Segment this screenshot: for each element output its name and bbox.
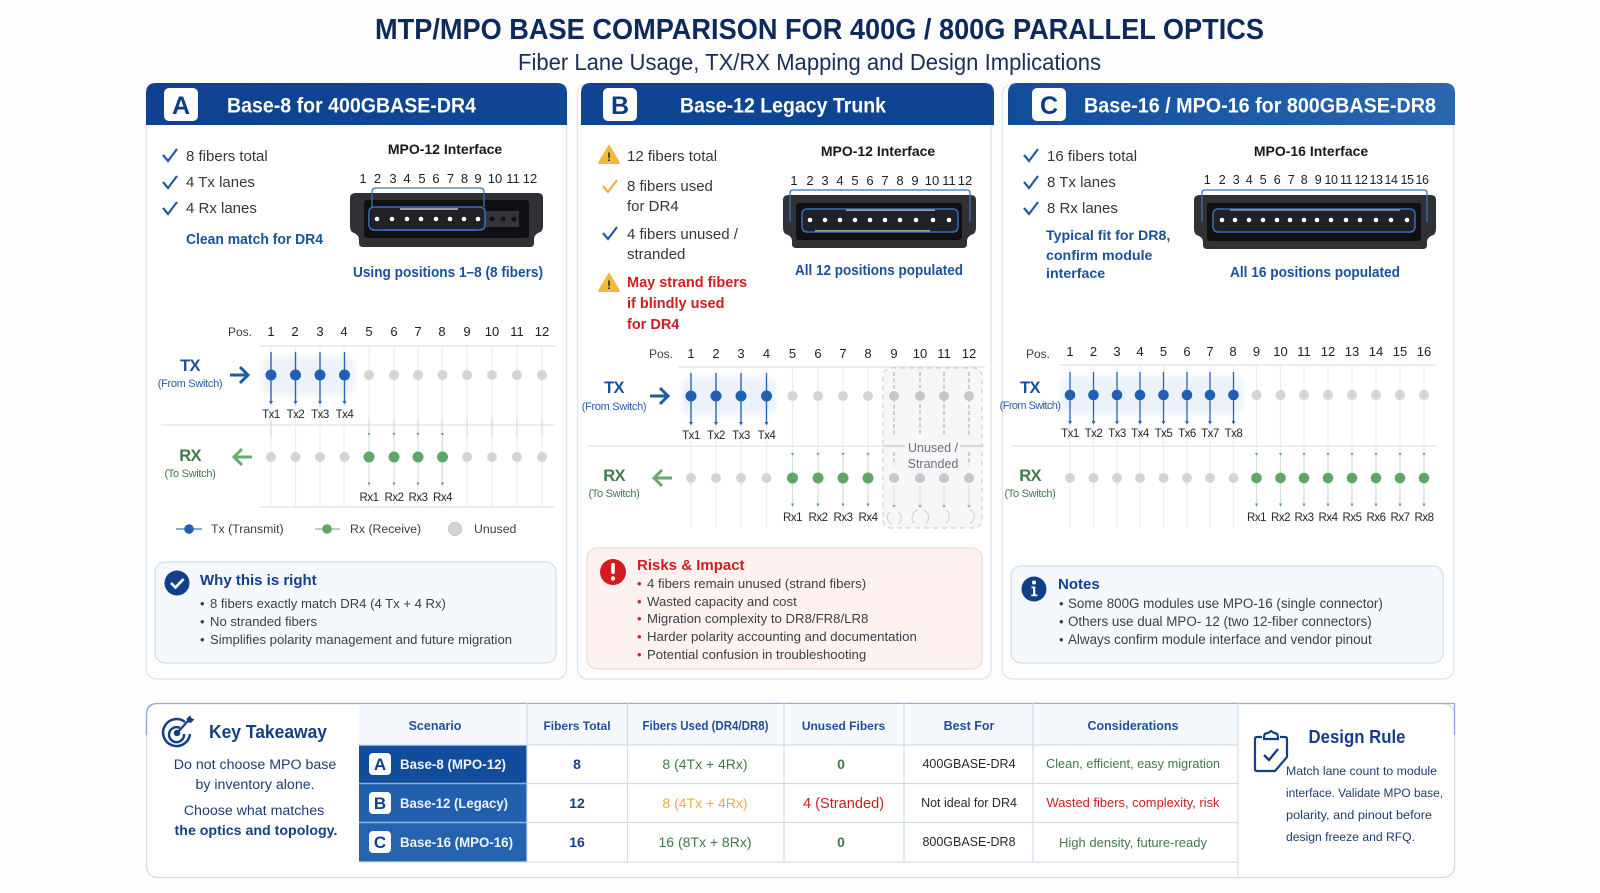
panel A lane map chart: 4 (340, 324, 348, 339)
RX dots: Rx4 (859, 512, 879, 524)
panel C checklist: 16 fibers total (1047, 148, 1137, 165)
callout: risks and impact: Migration complexity to DR8/FR8/LR8 (647, 611, 868, 626)
panel C connector diagram: 13 (1370, 173, 1383, 187)
RX dots: Rx1 (360, 492, 379, 504)
TX dots (1061, 372, 1429, 440)
panel A connector diagram: 12 (523, 171, 537, 186)
panel C connector diagram: 14 (1385, 173, 1398, 187)
table header: Considerations (1088, 719, 1179, 733)
panel A connector diagram (350, 141, 543, 281)
panel: bottom summary (146, 703, 1454, 878)
panel B header: B (611, 92, 629, 120)
panel B connector diagram: 5 (851, 173, 859, 188)
panel B connector diagram: 8 (896, 173, 904, 188)
panel B lane map chart: 5 (789, 346, 796, 361)
panel C lane map chart: 1 (1066, 344, 1074, 359)
panel C connector diagram: 7 (1288, 173, 1295, 187)
TX dots: Tx2 (707, 430, 725, 442)
panel A connector diagram: 4 (403, 171, 411, 186)
row: Base-12 (369, 792, 1220, 814)
RX row label (1004, 467, 1056, 500)
panel C lane map chart: 15 (1393, 344, 1407, 359)
panel B lane map chart: 7 (839, 346, 847, 361)
panel B checklist: May strand fibers (627, 275, 747, 291)
panel A lane map chart: 10 (485, 324, 499, 339)
row: Base-16: 0 (837, 834, 845, 850)
TX dots: Tx5 (1155, 428, 1172, 440)
panel C connector diagram: 3 (1233, 173, 1240, 187)
panel C header: Base-16 / MPO-16 for 800GBASE-DR8 (1084, 94, 1436, 118)
table header: Best For (944, 719, 994, 733)
TX dots: Tx1 (262, 409, 280, 421)
callout: notes: Some 800G modules use MPO-16 (single connector) (1068, 596, 1383, 611)
callout: risks and impact: Risks & Impact (637, 557, 745, 574)
row: Base-12: B (374, 794, 386, 813)
panel C lane map chart: 7 (1206, 344, 1214, 359)
panel A checklist: 8 fibers total (186, 148, 268, 165)
row: Base-12: 8 (4Tx + 4Rx) (662, 795, 748, 811)
RX dots: Rx7 (1391, 512, 1410, 524)
RX row label (164, 447, 252, 480)
panel B checklist (599, 146, 747, 333)
row: Base-8 (369, 753, 1220, 775)
panel C connector diagram: 12 (1355, 173, 1368, 187)
panel C lane map chart: 9 (1253, 344, 1260, 359)
callout: risks and impact: 4 fibers remain unused (strand fibers) (647, 576, 866, 591)
panel B lane map chart (582, 346, 985, 528)
panel B connector diagram: 11 (942, 173, 956, 188)
RX dots: Rx5 (1343, 512, 1362, 524)
panel B lane map chart: 3 (737, 346, 745, 361)
RX dots: Rx2 (1271, 512, 1290, 524)
callout: notes: Others use dual MPO- 12 (two 12-fiber connectors) (1068, 614, 1372, 629)
panel B connector diagram: 12 (958, 173, 972, 188)
panel B lane map chart: 1 (687, 346, 695, 361)
TX dots (682, 373, 873, 442)
panel A lane map chart: 9 (463, 324, 471, 339)
panel C checklist: 8 Rx lanes (1047, 200, 1118, 217)
TX row label (158, 357, 248, 390)
panel C lane map chart: 13 (1345, 344, 1359, 359)
RX dots: Rx3 (1295, 512, 1314, 524)
panel B checklist: ! (607, 152, 611, 164)
panel C lane map chart: 10 (1273, 344, 1288, 359)
panel C lane map chart: 3 (1113, 344, 1121, 359)
panel A checklist: 4 Rx lanes (186, 200, 257, 217)
panel B checklist: ! (607, 280, 611, 292)
stranded zone (883, 368, 982, 528)
TX row label: (From Switch) (158, 378, 222, 390)
panel C lane map chart (1000, 344, 1436, 528)
TX dots: Tx1 (1061, 428, 1079, 440)
panel B connector diagram: 6 (866, 173, 874, 188)
RX dots (1065, 453, 1434, 524)
RX dots (266, 433, 547, 504)
TX dots: Tx2 (1085, 428, 1102, 440)
panel A lane map chart: 11 (510, 324, 524, 339)
TX row label: TX (604, 379, 625, 397)
panel C connector diagram: MPO-16 Interface (1254, 143, 1368, 159)
design rule: polarity, and pinout before (1286, 808, 1432, 822)
callout: why this is right: • (200, 614, 205, 629)
panel A connector diagram: 2 (374, 171, 381, 186)
panel A lane map chart: Pos. (228, 325, 252, 339)
TX row label: TX (1020, 379, 1041, 397)
panel A connector diagram: 3 (389, 171, 397, 186)
design rule (1255, 727, 1443, 844)
panel: A Base-8 (146, 83, 567, 679)
panel C lane map chart: 14 (1369, 344, 1383, 359)
callout: why this is right: 8 fibers exactly match DR4 (4 Tx + 4 Rx) (210, 596, 446, 611)
key takeaway (163, 716, 337, 839)
table header: Fibers Used (DR4/DR8) (642, 719, 768, 733)
TX row label (1000, 379, 1060, 412)
key takeaway: Choose what matches (184, 803, 324, 819)
design rule: design freeze and RFQ. (1286, 830, 1415, 844)
panel A header (146, 83, 567, 125)
panel A connector diagram: 6 (432, 171, 440, 186)
callout: risks and impact: Harder polarity accounting and documentation (647, 629, 917, 644)
panel C lane map chart: 16 (1417, 344, 1431, 359)
callout: risks and impact (587, 548, 982, 669)
callout: notes (1011, 566, 1443, 663)
callout: risks and impact: • (637, 629, 642, 644)
panel C connector diagram: 4 (1246, 173, 1253, 187)
panel A lane map chart: 1 (267, 324, 275, 339)
row: Base-16: 16 (8Tx + 8Rx) (659, 834, 751, 850)
panel A lane map chart: 6 (390, 324, 398, 339)
RX dots: Rx6 (1367, 512, 1386, 524)
panel A header: A (172, 92, 190, 120)
panel A legend: Rx (Receive) (350, 522, 421, 536)
RX dots: Rx1 (1247, 512, 1266, 524)
panel A lane map chart: 7 (414, 324, 422, 339)
RX row label: (To Switch) (1004, 488, 1056, 500)
panel B lane map chart: 11 (937, 346, 951, 361)
panel C connector diagram: 10 (1325, 173, 1338, 187)
RX dots: Rx4 (1319, 512, 1339, 524)
TX dots: Tx3 (311, 409, 329, 421)
panel B checklist: for DR4 (627, 317, 679, 333)
panel C checklist: confirm module (1046, 248, 1153, 264)
panel C lane map chart: 2 (1090, 344, 1097, 359)
RX dots: Rx8 (1415, 512, 1434, 524)
panel A connector diagram: 5 (418, 171, 426, 186)
icon: clipboard check (1255, 731, 1287, 771)
panel C checklist (1024, 148, 1170, 282)
panel B checklist: 8 fibers used (627, 178, 713, 195)
panel B lane map chart: 8 (864, 346, 872, 361)
row: Base-16: Base-16 (MPO-16) (400, 835, 513, 850)
panel A checklist: Clean match for DR4 (186, 232, 323, 248)
RX row label: RX (1019, 467, 1041, 485)
RX row label: (To Switch) (588, 488, 640, 500)
TX dots: Tx3 (1108, 428, 1126, 440)
panel C checklist: Typical fit for DR8, (1046, 228, 1170, 244)
panel A lane map chart: 12 (535, 324, 549, 339)
panel A connector diagram: MPO-12 Interface (388, 141, 502, 157)
callout: notes: • (1059, 614, 1064, 629)
panel C header: C (1040, 92, 1058, 120)
row: Base-12: Base-12 (Legacy) (400, 796, 508, 811)
panel C lane map chart: 4 (1136, 344, 1144, 359)
TX dots: Tx3 (732, 430, 750, 442)
row: Base-16: High density, future-ready (1059, 836, 1208, 850)
panel B lane map chart: 10 (913, 346, 927, 361)
panel B header (581, 83, 994, 125)
panel C connector diagram: 11 (1340, 173, 1353, 187)
RX dots: Rx2 (385, 492, 404, 504)
stranded zone: Unused / (908, 441, 959, 455)
panel B header: Base-12 Legacy Trunk (680, 94, 886, 118)
panel C connector diagram: 9 (1315, 173, 1322, 187)
panel: B Base-12 (578, 83, 994, 679)
panel A header: Base-8 for 400GBASE-DR4 (227, 94, 476, 118)
key takeaway: by inventory alone. (195, 777, 315, 793)
panel B connector diagram: 4 (836, 173, 844, 188)
panel B lane map chart: 12 (962, 346, 976, 361)
panel A connector diagram: 9 (474, 171, 482, 186)
callout: why this is right: • (200, 596, 205, 611)
panel A lane map chart: 8 (438, 324, 446, 339)
TX row label: TX (180, 357, 201, 375)
TX dots: Tx8 (1225, 428, 1242, 440)
panel B lane map chart: Pos. (649, 347, 673, 361)
callout: notes: • (1059, 632, 1064, 647)
design rule: interface. Validate MPO base, (1286, 786, 1443, 800)
TX dots: Tx1 (682, 430, 700, 442)
panel B checklist: if blindly used (627, 296, 724, 312)
key takeaway: Key Takeaway (209, 722, 327, 742)
panel A connector diagram: 10 (488, 171, 502, 186)
callout: risks and impact: • (637, 594, 642, 609)
row: Base-12: Wasted fibers, complexity, risk (1046, 796, 1220, 810)
panel C lane map chart: Pos. (1026, 347, 1050, 361)
table header: Scenario (409, 719, 462, 733)
panel A connector diagram: 8 (461, 171, 468, 186)
panel C connector diagram: 2 (1219, 173, 1226, 187)
TX row label: (From Switch) (1000, 400, 1060, 412)
TX row label: (From Switch) (582, 401, 646, 413)
callout: why this is right: Simplifies polarity management and future migration (210, 632, 512, 647)
panel C header (1008, 83, 1455, 125)
panel B lane map chart: 4 (763, 346, 770, 361)
panel C checklist: 8 Tx lanes (1047, 174, 1116, 191)
panel C connector diagram: 8 (1301, 173, 1308, 187)
callout: notes: Always confirm module interface and vendor pinout (1068, 632, 1372, 647)
row: Base-8: 8 (4Tx + 4Rx) (662, 756, 748, 772)
stranded zone: Stranded (908, 457, 958, 471)
row: Base-8: A (374, 755, 386, 774)
panel A connector diagram: 11 (506, 171, 520, 186)
comparison table (359, 703, 1238, 877)
callout: why this is right: • (200, 632, 205, 647)
callout: why this is right: No stranded fibers (210, 614, 317, 629)
TX dots: Tx6 (1178, 428, 1196, 440)
key takeaway: the optics and topology. (175, 823, 337, 839)
RX row label: RX (179, 447, 201, 465)
panel B checklist: stranded (627, 246, 685, 263)
callout: risks and impact: Potential confusion in troubleshooting (647, 647, 866, 662)
row: Base-8: Clean, efficient, easy migration (1046, 757, 1220, 771)
row: Base-12: Not ideal for DR4 (921, 796, 1017, 810)
panel B connector diagram (783, 143, 976, 279)
panel C lane map chart: 12 (1321, 344, 1335, 359)
panel A connector diagram: 1 (359, 171, 367, 186)
callout: risks and impact: Wasted capacity and cost (647, 594, 797, 609)
callout: risks and impact: • (637, 611, 642, 626)
key takeaway: Do not choose MPO base (174, 757, 336, 773)
panel A checklist: 4 Tx lanes (186, 174, 255, 191)
panel B connector diagram: MPO-12 Interface (821, 143, 935, 159)
RX row label: (To Switch) (164, 468, 216, 480)
panel C connector diagram: 15 (1401, 173, 1414, 187)
RX dots (686, 453, 879, 524)
RX dots: Rx1 (783, 512, 802, 524)
panel B connector diagram: 9 (911, 173, 919, 188)
panel B connector diagram: 2 (806, 173, 814, 188)
table header: Fibers Total (543, 719, 611, 733)
panel B checklist: 4 fibers unused / (627, 226, 739, 243)
RX dots: Rx4 (433, 492, 453, 504)
row: Base-12: 4 (Stranded) (803, 796, 884, 812)
panel A legend: Unused (474, 522, 517, 536)
TX row label (582, 379, 668, 413)
callout: why this is right (155, 562, 556, 663)
callout: why this is right: Why this is right (200, 572, 317, 589)
panel A legend: Tx (Transmit) (211, 522, 284, 536)
callout: risks and impact: • (637, 576, 642, 591)
RX dots: Rx3 (409, 492, 428, 504)
panel B connector diagram: All 12 positions populated (795, 263, 963, 279)
panel A lane map chart: 5 (365, 324, 373, 339)
title: MTP/MPO BASE COMPARISON FOR 400G / 800G PARALLEL OPTICS (375, 14, 1264, 46)
row: Base-8: 0 (837, 756, 845, 772)
panel A connector diagram: Using positions 1–8 (8 fibers) (353, 265, 543, 281)
panel A checklist (163, 148, 323, 248)
panel C connector diagram: 5 (1260, 173, 1267, 187)
design rule: Design Rule (1308, 727, 1406, 747)
TX dots: Tx4 (1131, 428, 1150, 440)
panel C lane map chart: 11 (1297, 344, 1311, 359)
table header (409, 719, 1179, 733)
panel: C Base-16 (1000, 83, 1455, 679)
panel B lane map chart: 2 (712, 346, 720, 361)
panel A legend (176, 522, 517, 536)
row: Base-16 (369, 831, 1208, 853)
panel C connector diagram: 16 (1416, 173, 1429, 187)
panel C connector diagram: All 16 positions populated (1230, 265, 1400, 281)
panel C checklist: interface (1046, 266, 1105, 282)
table header: Unused Fibers (802, 719, 885, 733)
row: Base-8: 8 (573, 756, 581, 772)
row: Base-8: Base-8 (MPO-12) (400, 757, 506, 772)
row: Base-16: 800GBASE-DR8 (922, 835, 1016, 849)
RX dots: Rx2 (809, 512, 828, 524)
row: Base-16: 16 (569, 834, 585, 850)
RX dots: Rx3 (834, 512, 853, 524)
icon: target (163, 716, 194, 746)
TX dots: Tx7 (1201, 428, 1219, 440)
panel A lane map chart: 2 (291, 324, 299, 339)
TX dots: Tx4 (336, 409, 354, 421)
panel C connector diagram (1194, 143, 1436, 281)
panel C lane map chart: 6 (1183, 344, 1191, 359)
row: Base-16: C (374, 833, 386, 852)
panel A lane map chart (158, 324, 555, 507)
row: Base-12: 12 (569, 795, 585, 811)
panel B lane map chart: 6 (814, 346, 822, 361)
panel C lane map chart: 8 (1229, 344, 1237, 359)
panel B connector diagram: 10 (925, 173, 939, 188)
panel B connector diagram: 7 (881, 173, 889, 188)
panel B connector diagram: 3 (821, 173, 829, 188)
panel B checklist: for DR4 (627, 198, 679, 215)
panel B connector diagram: 1 (790, 173, 798, 188)
row: Base-8: 400GBASE-DR4 (922, 757, 1016, 771)
design rule: Match lane count to module (1286, 764, 1437, 778)
callout: risks and impact: • (637, 647, 642, 662)
panel C lane map chart: 5 (1160, 344, 1167, 359)
TX dots (262, 352, 547, 421)
RX row label: RX (603, 467, 625, 485)
panel B lane map chart: 9 (890, 346, 898, 361)
TX dots: Tx2 (287, 409, 304, 421)
panel C connector diagram: 1 (1204, 173, 1211, 187)
callout: notes: • (1059, 596, 1064, 611)
panel C connector diagram: 6 (1274, 173, 1281, 187)
panel A connector diagram: 7 (447, 171, 454, 186)
panel B checklist: 12 fibers total (627, 148, 717, 165)
callout: notes: Notes (1058, 576, 1100, 593)
panel A lane map chart: 3 (316, 324, 324, 339)
subtitle: Fiber Lane Usage, TX/RX Mapping and Design Implications (518, 49, 1101, 75)
RX row label (588, 467, 672, 500)
TX dots: Tx4 (758, 430, 776, 442)
